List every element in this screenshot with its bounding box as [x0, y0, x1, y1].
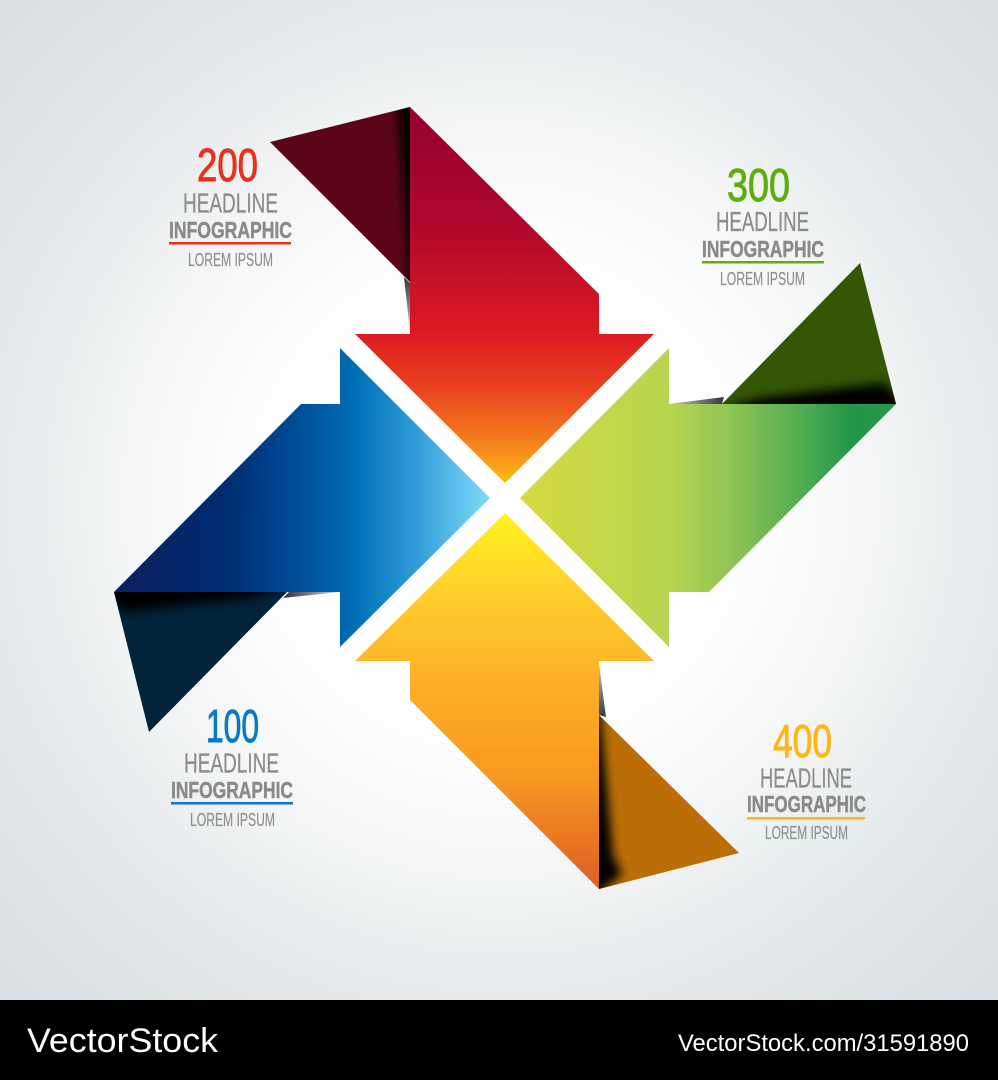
text block: 400 — [747, 715, 866, 843]
text block: 100: 100 — [206, 700, 259, 752]
text block: 200: HEADLINE — [183, 188, 278, 218]
text block: 300: INFOGRAPHIC — [702, 236, 824, 262]
blue arrow — [114, 348, 490, 647]
text block: 200: LOREM IPSUM — [188, 250, 273, 270]
panel: orange arrow 400 — [355, 513, 739, 905]
footer bar — [0, 1000, 998, 1080]
green folded flap — [670, 263, 896, 404]
text block: 300: 300 — [727, 159, 790, 211]
orange arrow — [355, 513, 654, 889]
text block: 200: 200 — [197, 139, 258, 191]
footer logo text: VectorStock — [27, 1022, 219, 1060]
text block: 200: INFOGRAPHIC — [169, 217, 292, 243]
text block: 100: HEADLINE — [184, 748, 279, 778]
text block: 300: HEADLINE — [716, 206, 809, 237]
panel: green arrow 300 — [520, 263, 915, 647]
text block: 400: HEADLINE — [760, 762, 852, 794]
panel: red arrow 200 — [270, 95, 654, 483]
green arrow — [520, 348, 896, 647]
text block: 400: 400 — [773, 715, 832, 767]
blue folded flap — [114, 592, 339, 732]
red arrow — [355, 107, 654, 483]
orange folded flap — [599, 664, 739, 889]
text block: 100: INFOGRAPHIC — [171, 777, 293, 803]
text block: 400: LOREM IPSUM — [765, 823, 848, 843]
text block: 300: LOREM IPSUM — [720, 269, 805, 289]
text block: 300 — [702, 159, 824, 289]
panel: blue arrow 100 — [95, 348, 490, 732]
text block: 100: LOREM IPSUM — [190, 810, 275, 830]
text block: 200 — [169, 139, 292, 270]
text block: 400: INFOGRAPHIC — [747, 791, 866, 817]
footer url text: VectorStock.com/31591890 — [678, 1030, 969, 1057]
text block: 100 — [171, 700, 293, 830]
red folded flap — [270, 107, 410, 332]
